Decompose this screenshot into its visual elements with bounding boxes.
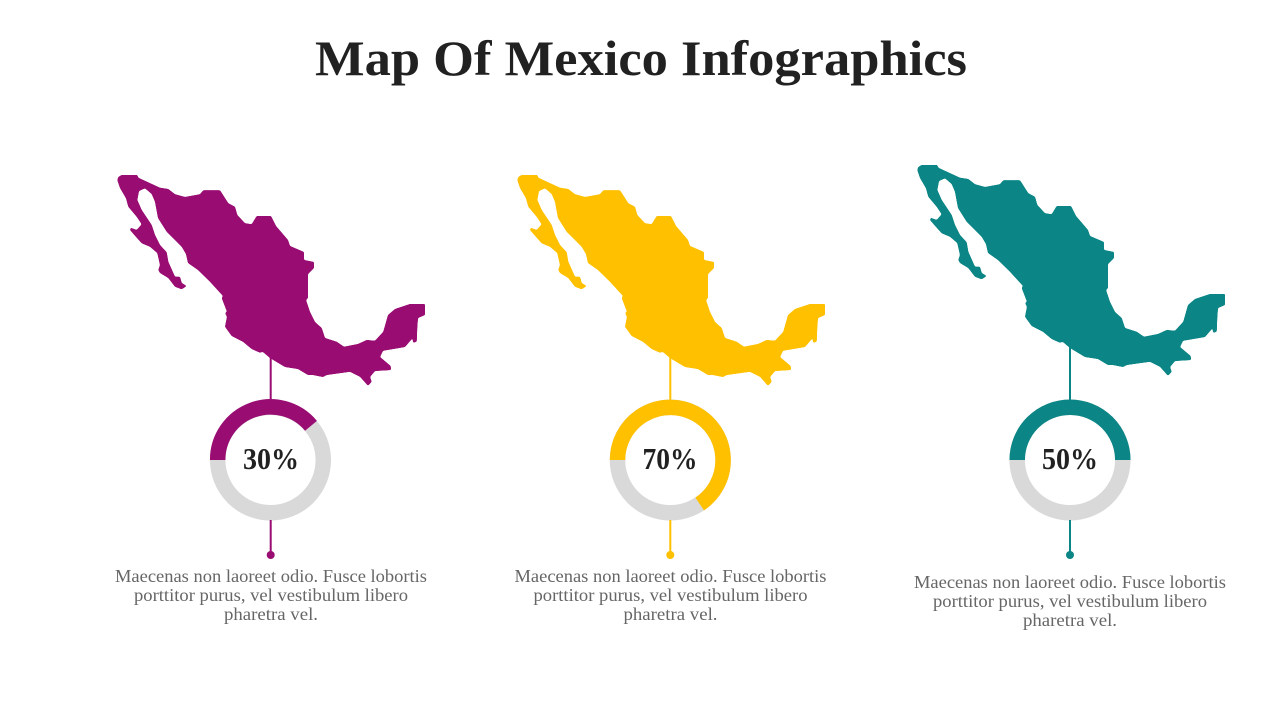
donut: 50%	[1017, 407, 1123, 513]
connector: donut to dot	[1066, 520, 1074, 559]
text block	[514, 566, 826, 624]
value: 50%: 50%	[1042, 441, 1098, 476]
map: teal Mexico	[917, 165, 1225, 376]
map: yellow Mexico	[517, 175, 825, 386]
panel: yellow map 70%	[514, 175, 826, 624]
text block: pharetra vel.	[624, 604, 718, 624]
text block: porttitor purus, vel vestibulum libero	[933, 591, 1207, 611]
text block: Maecenas non laoreet odio. Fusce lobortis	[914, 572, 1226, 592]
connector: donut to dot	[666, 520, 674, 559]
panel: purple map 30%	[115, 175, 427, 624]
text block: porttitor purus, vel vestibulum libero	[534, 585, 808, 605]
title: Map Of Mexico Infographics	[315, 30, 967, 86]
text block	[115, 566, 427, 624]
donut: 70%	[618, 407, 723, 513]
panel: teal map 50%	[914, 165, 1226, 630]
text block: pharetra vel.	[224, 604, 318, 624]
map: purple Mexico	[117, 175, 425, 386]
value: 70%: 70%	[642, 441, 698, 476]
connector: map to donut	[669, 352, 671, 402]
value: 30%: 30%	[243, 441, 299, 476]
text block: pharetra vel.	[1023, 610, 1117, 630]
text block: Maecenas non laoreet odio. Fusce lobortis	[115, 566, 427, 586]
donut: 30%	[218, 407, 323, 513]
connector: map to donut	[1069, 342, 1071, 402]
connector: map to donut	[270, 352, 272, 402]
text block: Maecenas non laoreet odio. Fusce lobortis	[514, 566, 826, 586]
connector: donut to dot	[267, 520, 275, 559]
text block	[914, 572, 1226, 630]
text block: porttitor purus, vel vestibulum libero	[134, 585, 408, 605]
